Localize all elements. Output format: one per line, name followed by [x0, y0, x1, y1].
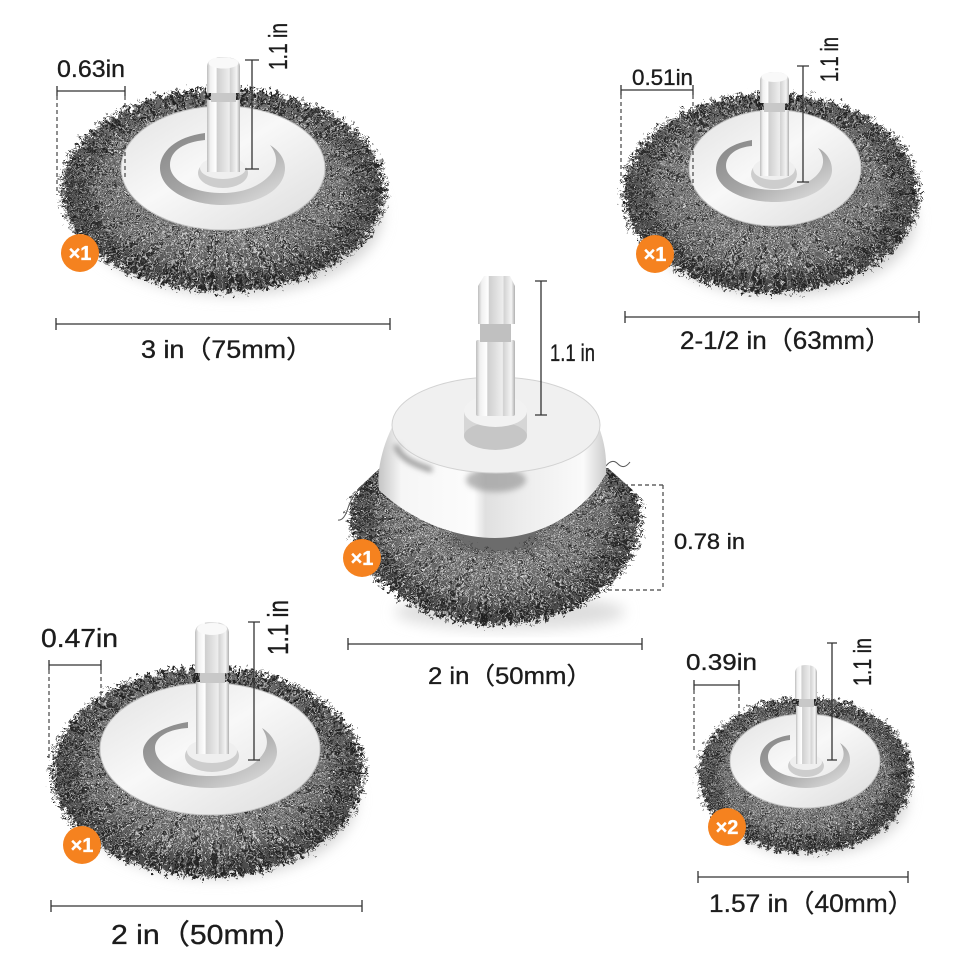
dimension: 3 in wheel thickness and shank: [57, 56, 259, 195]
hex shaft: [760, 72, 789, 176]
label: 1.57 in (40mm): 1.57 in（40mm）: [709, 890, 914, 918]
dimension: 1.57 in wheel width: [698, 871, 908, 883]
dimension: 3 in width: [56, 318, 390, 330]
collar: [464, 395, 527, 450]
badge ×1: ×1: [71, 835, 93, 857]
wire bristles: [64, 90, 382, 290]
cup top face: [392, 377, 600, 473]
hex shaft: [476, 276, 515, 416]
brush: 1.57 in wheel: [700, 665, 910, 855]
badge ×1: ×1: [69, 243, 91, 265]
label: 1.1 in vertical: 1.1 in: [849, 638, 877, 686]
collar: [788, 754, 824, 777]
dimension: cup shank: [535, 281, 547, 415]
cup bristles: [343, 468, 646, 631]
label: 0.51in: 0.51in: [632, 65, 693, 90]
cup side: [378, 420, 606, 538]
collar: [198, 157, 248, 188]
badge ×1: [636, 235, 674, 273]
dimension: cup bristle height: [608, 485, 663, 590]
dimension: 2-1/2 in width: [625, 311, 919, 323]
inner ring: [160, 133, 285, 205]
collar: [185, 739, 239, 772]
brush: 2 in cup: [338, 276, 639, 630]
brush: 2-1/2 in wheel: [626, 72, 916, 296]
label: 2 in (50mm): 2 in（50mm）: [428, 663, 592, 690]
brush: 3 in wheel: [64, 57, 382, 295]
badge ×2: ×2: [716, 817, 738, 839]
badge ×1: [61, 234, 99, 272]
washer: [730, 714, 880, 808]
washer: [689, 110, 861, 226]
dimension: 1.57 in wheel thickness and shank: [686, 643, 837, 760]
hex shaft: [795, 665, 817, 764]
label: 0.39in: 0.39in: [686, 649, 757, 675]
washer: [100, 683, 320, 815]
wire bristles: [626, 95, 916, 291]
dimension: cup width: [348, 638, 642, 650]
stray wires: [338, 461, 630, 520]
cup side patch: [466, 468, 526, 492]
inner ring: [143, 722, 277, 788]
dimension: 2 in wheel width: [51, 900, 362, 912]
label: 2 in (50mm): 2 in（50mm）: [111, 919, 304, 950]
washer: [121, 106, 325, 230]
wire bristles: [55, 669, 361, 875]
cup shoulder shadow: [396, 445, 432, 470]
brush: 2 in wheel: [55, 622, 361, 878]
badge ×1: ×1: [351, 548, 373, 570]
label: 3 in (75mm): 3 in（75mm）: [141, 336, 313, 364]
label: 0.47in: 0.47in: [41, 623, 118, 653]
label: 1.1 in vertical: 1.1 in: [816, 37, 844, 82]
label: 1.1 in vertical: 1.1 in: [263, 23, 293, 70]
hex shaft: [195, 622, 229, 754]
badge ×1: [63, 826, 101, 864]
label: 0.63in: 0.63in: [57, 56, 125, 83]
badge ×1: [343, 539, 381, 577]
hex shaft: [207, 57, 240, 172]
label: 1.1 in: 1.1 in: [550, 340, 595, 367]
label: 1.1 in vertical: 1.1 in: [263, 600, 295, 655]
collar: [751, 158, 797, 189]
dimension: 2-1/2 in wheel thickness and shank: [621, 65, 809, 190]
wire bristles: [700, 699, 910, 851]
label: 0.78 in: 0.78 in: [674, 529, 745, 554]
inner ring: [716, 140, 832, 202]
badge ×2: [708, 808, 746, 846]
inner ring: [760, 735, 850, 788]
badge ×1: ×1: [644, 244, 666, 266]
label: 2-1/2 in (63mm): 2-1/2 in（63mm）: [680, 327, 891, 355]
dimension: 2 in wheel thickness and shank: [41, 622, 260, 760]
